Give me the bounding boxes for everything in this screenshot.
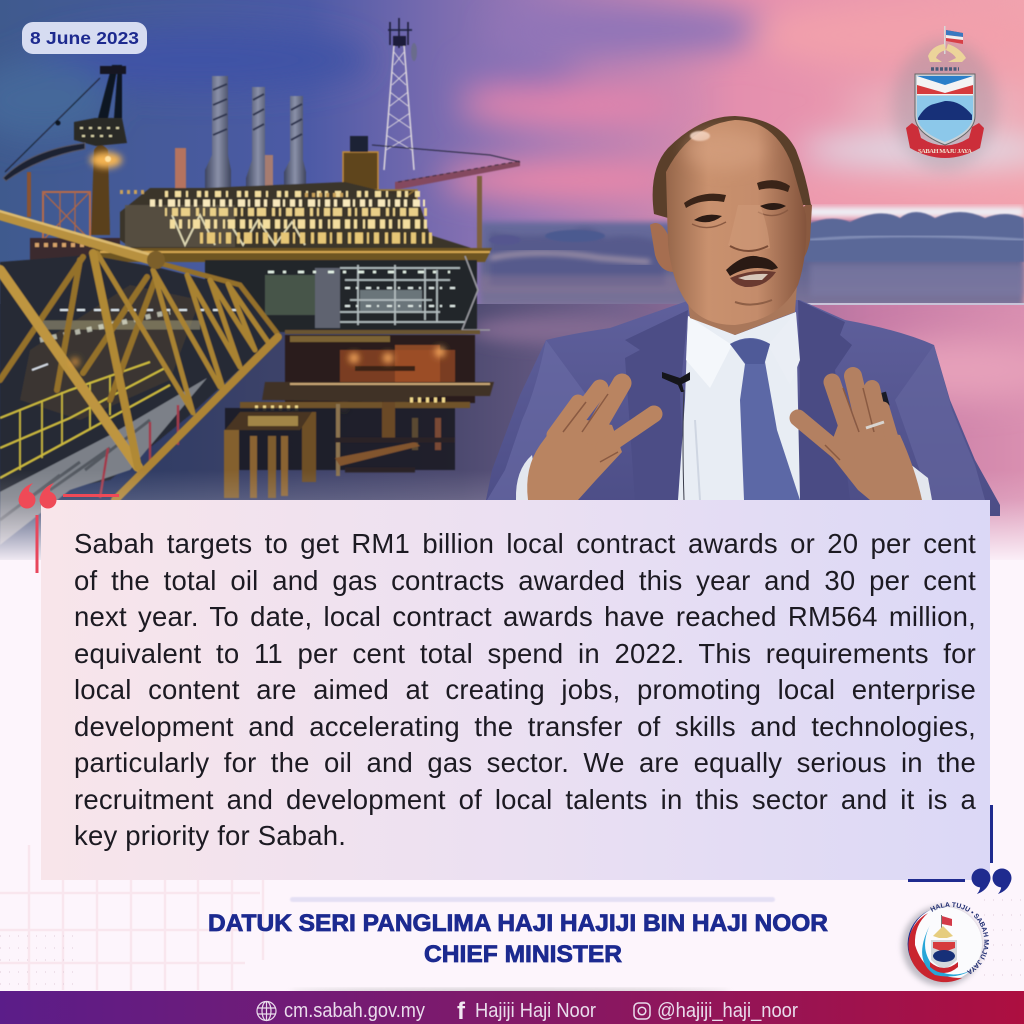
background photo: sunset sky and sea — [0, 0, 1024, 564]
Sabah state crest — [893, 26, 997, 170]
facebook name: Hajiji Haji Noor — [475, 1000, 596, 1022]
nose — [728, 205, 770, 251]
clouds on the horizon — [480, 207, 1024, 308]
right crane — [343, 136, 520, 254]
moustache and mouth — [726, 256, 778, 276]
tie — [730, 338, 800, 500]
quote text block: of the total oil and gas contracts awarded this year and 30 per cent — [74, 564, 976, 596]
opening quotation mark — [18, 483, 119, 573]
round campaign seal: HALA TUJU • SABAH MAJU JAYA — [930, 902, 989, 974]
website: cm.sabah.gov.my — [284, 1000, 425, 1022]
soft divider above name — [290, 897, 775, 902]
quote text block: development and accelerating the transfer of skills and technologies, — [74, 710, 976, 742]
quote text block: equivalent to 11 per cent total spend in 2022. This requirements for — [74, 638, 976, 668]
footer shadow — [290, 989, 730, 995]
mid-level pipework — [205, 256, 490, 334]
quote text block: recruitment and development of local talents in this sector and it is a — [74, 784, 976, 814]
jacket legs over water — [224, 402, 455, 498]
quote text block — [74, 528, 976, 851]
quote text block: local content are aimed at creating jobs, promoting local enterprise — [74, 674, 976, 705]
communications tower — [384, 18, 417, 170]
face — [666, 120, 806, 325]
quote text block: key priority for Sabah. — [74, 820, 346, 851]
date badge — [22, 22, 147, 54]
footer bar — [0, 991, 1024, 1024]
icon: instagram — [634, 1003, 650, 1019]
three exhaust stacks — [205, 76, 306, 215]
lower deck with orange lamps — [240, 335, 494, 417]
salmon stack and scaffold — [30, 148, 186, 262]
shield — [915, 74, 975, 145]
speaker title: CHIEF MINISTER — [424, 941, 622, 968]
yellow railings — [0, 362, 170, 478]
ears and hair behind — [650, 223, 674, 272]
lapels — [625, 310, 688, 500]
left hand — [516, 383, 654, 500]
offshore rig — [0, 18, 520, 545]
eyebrows and eyes — [684, 180, 790, 208]
closing quotation mark — [908, 805, 1012, 894]
bottom fade of photo — [0, 470, 1024, 565]
foreground golden truss walkway — [0, 210, 278, 545]
truss chords and struts — [0, 210, 278, 500]
shirt — [678, 312, 800, 500]
arms holding flag — [928, 44, 966, 62]
speaker name: DATUK SERI PANGLIMA HAJI HAJIJI BIN HAJI NOOR — [208, 910, 828, 937]
quote text block: particularly for the oil and gas sector. We are equally serious in the — [74, 747, 976, 778]
quote text block: next year. To date, local contract awards have reached RM564 million, — [74, 601, 976, 632]
main deck — [30, 248, 492, 278]
flag — [944, 26, 963, 54]
right hand — [798, 376, 932, 500]
portrait of the Chief Minister — [486, 116, 1000, 516]
quote text block: Sabah targets to get RM1 billion local contract awards or 20 per cent — [74, 528, 976, 559]
text panel — [41, 500, 990, 880]
ribbon with motto — [906, 123, 984, 158]
grey walkway floor — [0, 378, 207, 545]
neck — [685, 270, 798, 335]
instagram handle: @hajiji_haji_noor — [657, 1000, 798, 1022]
decorative dotted texture — [0, 900, 1024, 984]
left crane with pedestal — [3, 65, 127, 235]
icon: globe — [257, 1002, 276, 1020]
decorative background grid — [0, 845, 263, 990]
deck lights around truss — [32, 358, 79, 370]
round campaign seal — [899, 902, 989, 989]
jacket — [486, 300, 1000, 516]
lapel microphone — [662, 372, 690, 392]
upper process modules with lights — [120, 182, 490, 254]
date badge: 8 June 2023 — [30, 28, 139, 48]
ribbon with motto: SABAH MAJU JAYA — [918, 148, 972, 155]
